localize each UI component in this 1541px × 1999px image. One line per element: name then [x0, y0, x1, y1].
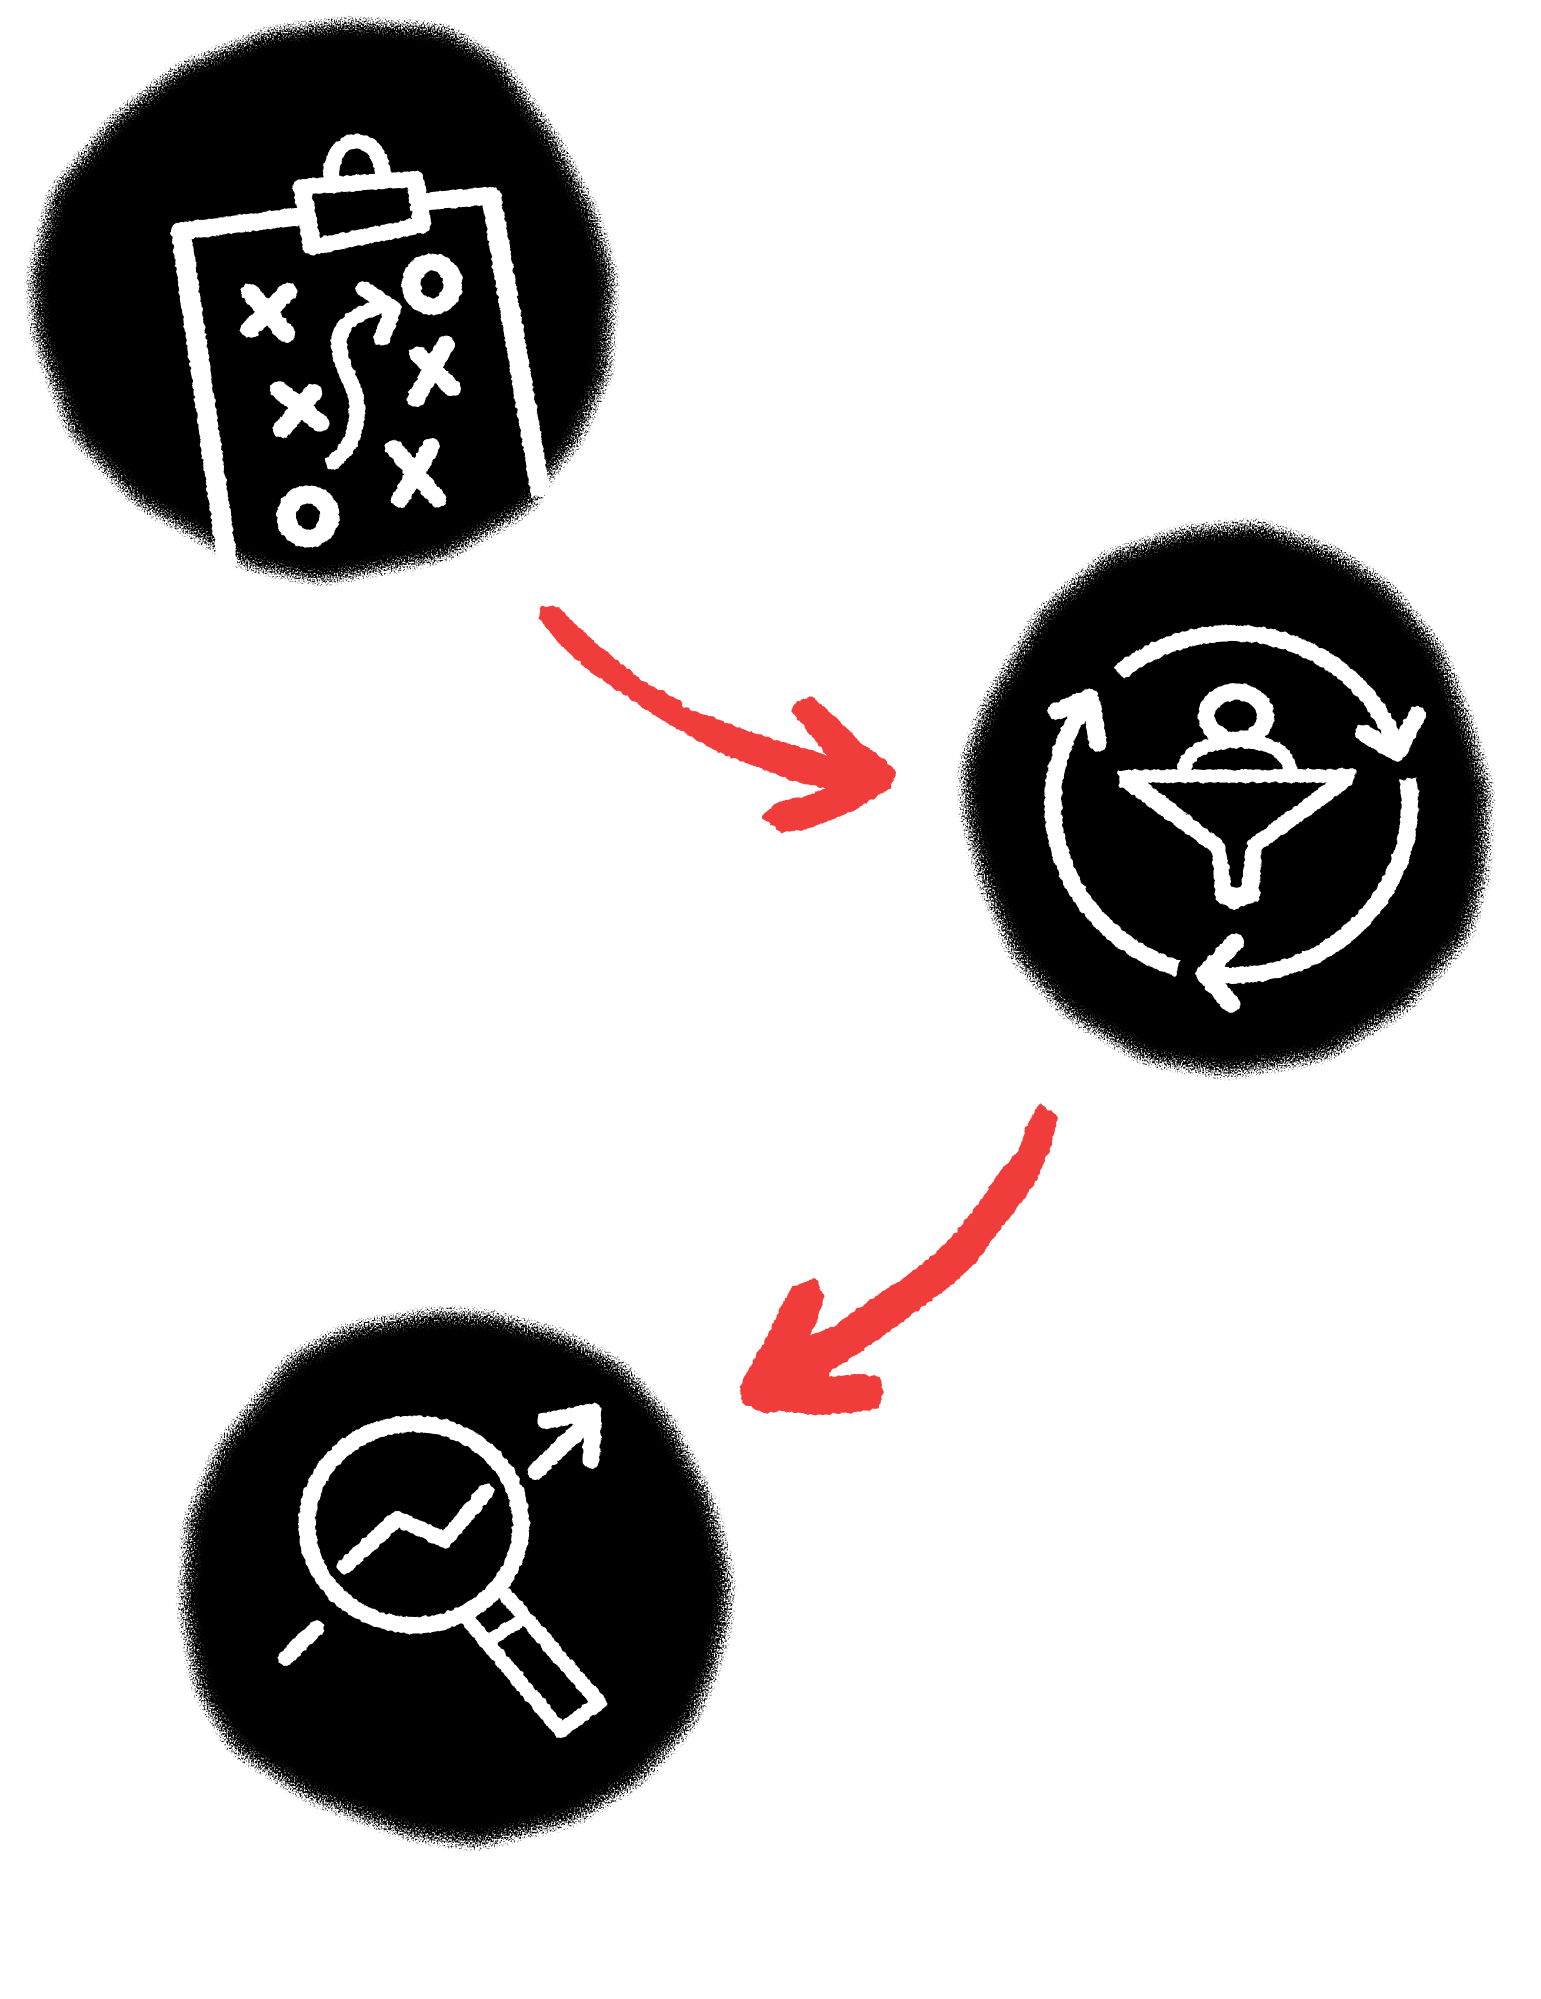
badge blob: funnel [959, 520, 1493, 1079]
badge blob: clipboard [27, 18, 618, 585]
arrow: step 2 to step 3 [741, 1105, 1057, 1414]
step 2: funnel badge [959, 520, 1493, 1079]
step 3: magnifier badge [178, 1308, 733, 1850]
icon: magnifying glass with trend line [286, 1411, 599, 1731]
icon: clipboard with play diagram [181, 141, 541, 567]
icon: funnel with person and cycle arrows [1053, 633, 1417, 1004]
step 1: clipboard badge [27, 18, 618, 585]
badge blob: magnifier [178, 1308, 733, 1850]
arrow: step 1 to step 2 [540, 607, 895, 832]
